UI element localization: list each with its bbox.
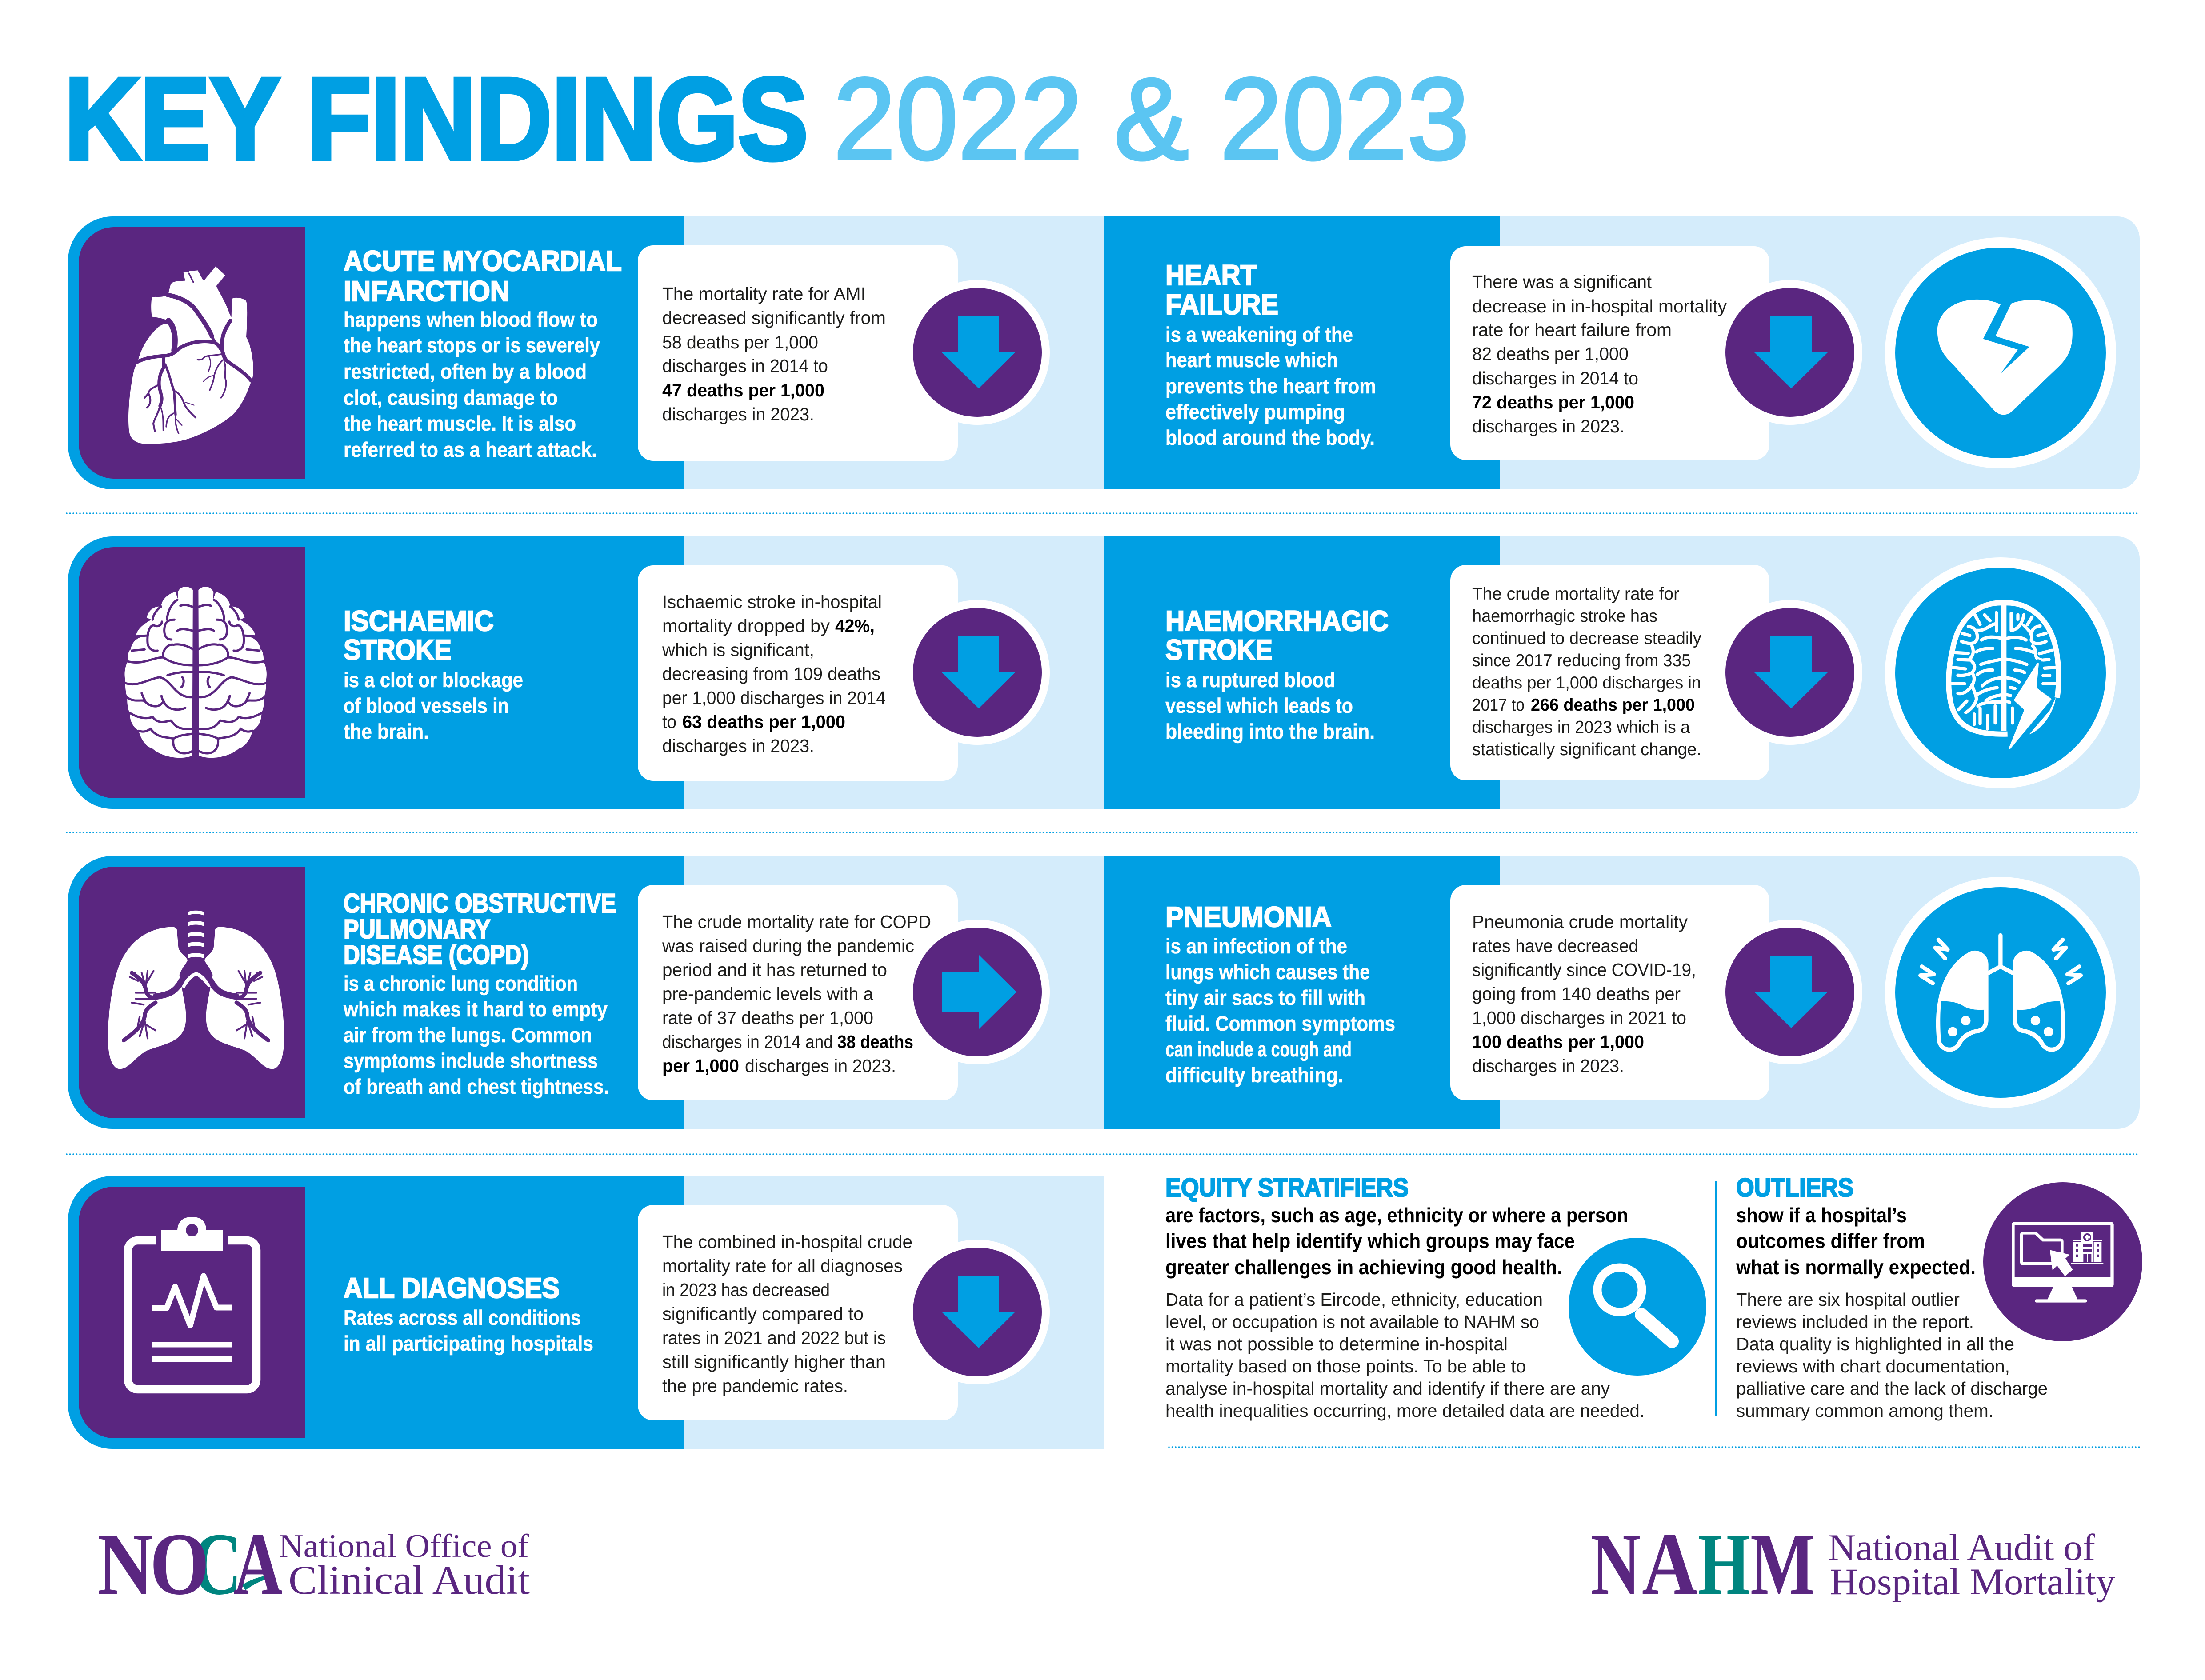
result card: 47 deaths per 1,000 <box>662 380 824 400</box>
body text: Data for a patient’s Eircode, ethnicity, education <box>1165 1289 1543 1310</box>
result card: discharges in 2023. <box>662 404 814 424</box>
heading <box>344 245 622 307</box>
intro text: outcomes differ from <box>1736 1229 1925 1252</box>
body text: reviews with chart documentation, <box>1736 1356 2010 1376</box>
description: air from the lungs. Common <box>344 1023 592 1047</box>
result card: There was a significant <box>1472 272 1652 292</box>
result card: The crude mortality rate for <box>1472 584 1679 604</box>
result card: discharges in 2023. <box>1472 416 1625 436</box>
logo: NAHM: N <box>1591 1515 1641 1613</box>
description <box>1165 668 1375 743</box>
result card: to <box>662 712 676 732</box>
description <box>344 668 523 743</box>
description: heart muscle which <box>1165 348 1338 372</box>
result card: in 2023 has decreased <box>662 1280 830 1300</box>
description <box>344 308 600 461</box>
heading: HEART <box>1165 259 1257 291</box>
result card: per 1,000 discharges in 2014 <box>662 688 886 708</box>
result card <box>1450 565 1769 780</box>
logo: NAHM: M <box>1750 1515 1815 1613</box>
body text: it was not possible to determine in-hospital <box>1165 1334 1508 1354</box>
description: vessel which leads to <box>1165 694 1353 717</box>
icon: lungs <box>108 911 284 1069</box>
result card: The mortality rate for AMI <box>662 284 866 304</box>
intro text: are factors, such as age, ethnicity or where a person <box>1165 1204 1628 1227</box>
description: in all participating hospitals <box>344 1332 593 1355</box>
result card: discharges in 2023. <box>1472 1056 1624 1076</box>
panel: haemorrhagic stroke <box>1104 536 2140 809</box>
description: of blood vessels in <box>344 694 509 717</box>
description: bleeding into the brain. <box>1165 720 1375 743</box>
description: blood around the body. <box>1165 426 1375 449</box>
result card: 2017 to <box>1472 696 1525 715</box>
body text: mortality based on those points. To be able to <box>1165 1356 1526 1376</box>
description: is a chronic lung condition <box>344 972 578 995</box>
panel: equity stratifiers <box>1165 1173 1706 1421</box>
description: effectively pumping <box>1165 400 1345 424</box>
result card <box>1450 246 1769 460</box>
result card: 82 deaths per 1,000 <box>1472 344 1629 364</box>
result card: since 2017 reducing from 335 <box>1472 651 1691 670</box>
heading <box>344 605 494 666</box>
result card: discharges in 2014 to <box>662 356 828 376</box>
result card: The crude mortality rate for COPD <box>662 912 931 932</box>
result card: 38 deaths <box>837 1032 913 1052</box>
description: tiny air sacs to fill with <box>1165 986 1365 1009</box>
description: is a weakening of the <box>1165 323 1353 346</box>
description: lungs which causes the <box>1165 960 1370 984</box>
heading: ACUTE MYOCARDIAL <box>344 245 622 277</box>
description: of breath and chest tightness. <box>344 1075 609 1098</box>
result card: per 1,000 <box>662 1056 739 1076</box>
panel: COPD <box>68 856 1104 1129</box>
description <box>343 972 609 1098</box>
result card: 100 deaths per 1,000 <box>1472 1032 1644 1052</box>
result card <box>638 885 958 1100</box>
body text: summary common among them. <box>1736 1400 1993 1421</box>
logo: NOCA <box>97 1515 530 1613</box>
result card: pre-pandemic levels with a <box>662 984 873 1004</box>
result card: which is significant, <box>662 640 814 660</box>
panel: pneumonia <box>1104 856 2140 1129</box>
heading: PNEUMONIA <box>1165 901 1332 933</box>
icon: clipboard <box>128 1217 256 1389</box>
panel: ischaemic stroke <box>68 536 1104 809</box>
description: the heart muscle. It is also <box>344 412 576 435</box>
result card <box>638 565 958 781</box>
logo: NAHM: National Audit of <box>1828 1527 2096 1568</box>
body text: palliative care and the lack of discharge <box>1736 1378 2048 1399</box>
result card: Pneumonia crude mortality <box>1472 912 1688 932</box>
body text <box>1165 1289 1645 1421</box>
result card: continued to decrease steadily <box>1472 629 1701 648</box>
title: 2022 & 2023 <box>833 54 1469 184</box>
description: symptoms include shortness <box>344 1049 598 1072</box>
description: referred to as a heart attack. <box>344 438 597 461</box>
result card: decreased significantly from <box>662 308 886 328</box>
intro text: show if a hospital’s <box>1736 1204 1907 1227</box>
icon: right arrow <box>905 920 1050 1064</box>
result card <box>1450 885 1769 1100</box>
heading: STROKE <box>1165 634 1273 666</box>
heading: EQUITY STRATIFIERS <box>1165 1173 1409 1202</box>
description <box>1165 323 1376 449</box>
body text: Data quality is highlighted in all the <box>1736 1334 2014 1354</box>
result card: 63 deaths per 1,000 <box>682 712 845 732</box>
icon: down arrow <box>1717 280 1862 425</box>
icon: down arrow <box>1717 600 1862 745</box>
description: fluid. Common symptoms <box>1165 1012 1395 1035</box>
icon: magnifying glass <box>1569 1238 1706 1376</box>
logo: NAHM: H <box>1698 1515 1750 1613</box>
panel: all diagnoses <box>68 1176 1104 1449</box>
logo: NAHM <box>1591 1515 2115 1613</box>
intro text <box>1736 1204 1976 1279</box>
description: the brain. <box>344 720 429 743</box>
result card: Ischaemic stroke in-hospital <box>662 592 882 612</box>
icon: anatomical heart <box>128 266 253 444</box>
heading <box>1165 259 1278 320</box>
result card: 266 deaths per 1,000 <box>1531 696 1695 715</box>
heading: OUTLIERS <box>1736 1173 1853 1202</box>
icon: down arrow <box>1717 920 1862 1064</box>
heading <box>1165 605 1389 666</box>
result card: 42%, <box>835 616 875 636</box>
intro text: lives that help identify which groups may face <box>1165 1229 1575 1252</box>
panel: acute myocardial infarction <box>68 216 1104 489</box>
logo: NOCA: National Office of <box>279 1528 529 1564</box>
title <box>64 54 1469 184</box>
body text: There are six hospital outlier <box>1736 1289 1960 1310</box>
result card: haemorrhagic stroke has <box>1472 607 1657 626</box>
logo: NAHM: A <box>1642 1515 1697 1613</box>
result card: was raised during the pandemic <box>662 936 914 956</box>
result card: deaths per 1,000 discharges in <box>1472 673 1701 692</box>
result card: rates have decreased <box>1472 936 1638 956</box>
result card: discharges in 2023. <box>745 1056 896 1076</box>
icon: monitor with hospital <box>1983 1182 2142 1341</box>
icon: down arrow <box>905 600 1050 745</box>
heading: ALL DIAGNOSES <box>344 1272 560 1304</box>
result card: period and it has returned to <box>662 960 887 980</box>
panel: heart failure <box>1104 216 2140 489</box>
heading: INFARCTION <box>344 275 510 307</box>
body text <box>1736 1289 2048 1421</box>
heading: STROKE <box>344 634 452 666</box>
result card: 58 deaths per 1,000 <box>662 332 818 352</box>
title: KEY FINDINGS <box>64 54 808 184</box>
description: the heart stops or is severely <box>344 333 600 357</box>
result card: 72 deaths per 1,000 <box>1472 392 1634 412</box>
heading: CHRONIC OBSTRUCTIVE <box>344 888 616 918</box>
intro text <box>1165 1204 1628 1279</box>
description: happens when blood flow to <box>344 308 598 331</box>
description: clot, causing damage to <box>344 386 558 409</box>
icon: brain <box>124 587 267 758</box>
intro text: what is normally expected. <box>1736 1256 1976 1279</box>
body text: analyse in-hospital mortality and identify if there are any <box>1165 1378 1610 1399</box>
description: is an infection of the <box>1165 934 1347 958</box>
heading: ISCHAEMIC <box>344 605 494 637</box>
result card <box>638 245 958 461</box>
description <box>1165 934 1395 1087</box>
logo: NOCA: N <box>97 1515 153 1613</box>
heading <box>344 888 616 970</box>
logo: NOCA: C <box>192 1515 242 1613</box>
logo: NOCA: O <box>150 1515 209 1613</box>
result card: The combined in-hospital crude <box>662 1232 912 1252</box>
result card: discharges in 2014 and <box>662 1032 833 1052</box>
result card: statistically significant change. <box>1472 740 1701 759</box>
heading: PULMONARY <box>344 914 491 944</box>
icon: down arrow <box>905 280 1050 425</box>
icon: lungs with fluid <box>1885 877 2116 1108</box>
description: is a ruptured blood <box>1165 668 1335 692</box>
panel: outliers <box>1736 1173 2142 1421</box>
heading: HAEMORRHAGIC <box>1165 605 1389 637</box>
body text: reviews included in the report. <box>1736 1312 1974 1332</box>
logo: NOCA: Clinical Audit <box>288 1557 530 1603</box>
result card: discharges in 2023 which is a <box>1472 718 1690 737</box>
logo: NOCA: A <box>233 1515 283 1613</box>
result card: going from 140 deaths per <box>1472 984 1681 1004</box>
result card: still significantly higher than <box>662 1352 886 1372</box>
result card <box>638 1205 958 1420</box>
description: prevents the heart from <box>1165 374 1376 398</box>
result card: rates in 2021 and 2022 but is <box>662 1328 886 1348</box>
description: Rates across all conditions <box>344 1306 581 1329</box>
heading: FAILURE <box>1165 288 1278 320</box>
result card: significantly compared to <box>662 1304 864 1324</box>
result card: rate for heart failure from <box>1472 320 1672 340</box>
description: which makes it hard to empty <box>343 997 608 1021</box>
body text: level, or occupation is not available to NAHM so <box>1165 1312 1539 1332</box>
icon: down arrow <box>905 1240 1050 1384</box>
result card: mortality rate for all diagnoses <box>662 1256 903 1276</box>
description <box>344 1306 593 1355</box>
intro text: greater challenges in achieving good health. <box>1165 1256 1562 1279</box>
logo: NAHM: Hospital Mortality <box>1830 1561 2115 1603</box>
result card: 1,000 discharges in 2021 to <box>1472 1008 1686 1028</box>
result card: discharges in 2014 to <box>1472 368 1638 388</box>
result card: discharges in 2023. <box>662 736 814 756</box>
description: restricted, often by a blood <box>344 360 587 383</box>
description: difficulty breathing. <box>1165 1063 1343 1087</box>
heading: DISEASE (COPD) <box>344 940 529 970</box>
icon: brain with lightning bolt <box>1885 557 2116 788</box>
result card: rate of 37 deaths per 1,000 <box>662 1008 873 1028</box>
description: can include a cough and <box>1165 1037 1352 1061</box>
result card: decreasing from 109 deaths <box>662 664 880 684</box>
result card: mortality dropped by <box>662 616 830 636</box>
body text: health inequalities occurring, more detailed data are needed. <box>1165 1400 1645 1421</box>
result card: significantly since COVID-19, <box>1472 960 1696 980</box>
result card: the pre pandemic rates. <box>662 1376 848 1396</box>
description: is a clot or blockage <box>344 668 523 692</box>
icon: broken heart <box>1885 237 2116 468</box>
result card: decrease in in-hospital mortality <box>1472 296 1727 316</box>
